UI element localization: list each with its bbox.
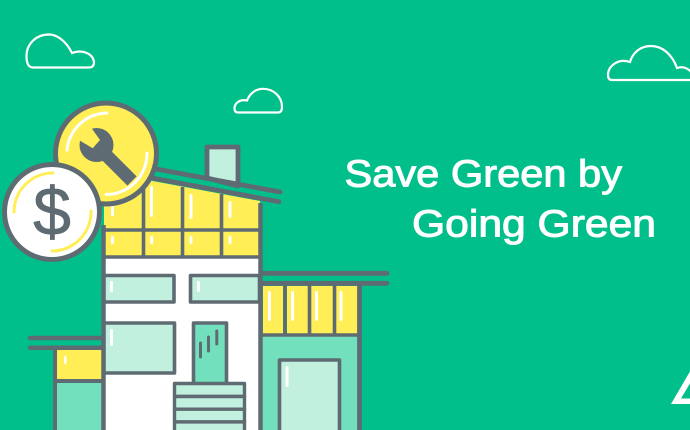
house walls	[104, 203, 260, 430]
lower wall	[261, 335, 359, 430]
dollar coin	[4, 164, 100, 260]
front steps	[174, 384, 244, 430]
garage door	[280, 360, 340, 430]
cloud: middle	[234, 89, 282, 112]
dollar sign: $	[33, 174, 71, 250]
upper left window	[104, 276, 174, 302]
chimney	[207, 147, 238, 186]
annex lower wall	[55, 381, 103, 430]
yellow windows	[263, 286, 358, 334]
front door	[194, 323, 226, 385]
main house body	[104, 256, 260, 430]
roof grid	[104, 180, 260, 257]
coin highlight	[67, 113, 147, 194]
icon: wrench	[78, 126, 132, 181]
roof lines	[152, 169, 280, 202]
coin highlight	[14, 173, 91, 251]
title	[344, 154, 656, 246]
title line 2: Going Green	[412, 204, 656, 246]
left annex	[30, 338, 103, 430]
annex window	[55, 349, 103, 381]
upper right window	[190, 276, 260, 302]
wrench coin	[56, 103, 156, 204]
roof highlights	[111, 186, 232, 244]
cloud: top left	[26, 34, 94, 68]
house illustration	[30, 147, 387, 430]
lower left window	[104, 323, 174, 373]
roof yellow panels	[104, 172, 260, 256]
right annex	[261, 273, 387, 430]
logo triangle, bottom right	[671, 368, 690, 404]
title line 1: Save Green by	[344, 154, 622, 196]
cloud: top right	[608, 46, 690, 80]
